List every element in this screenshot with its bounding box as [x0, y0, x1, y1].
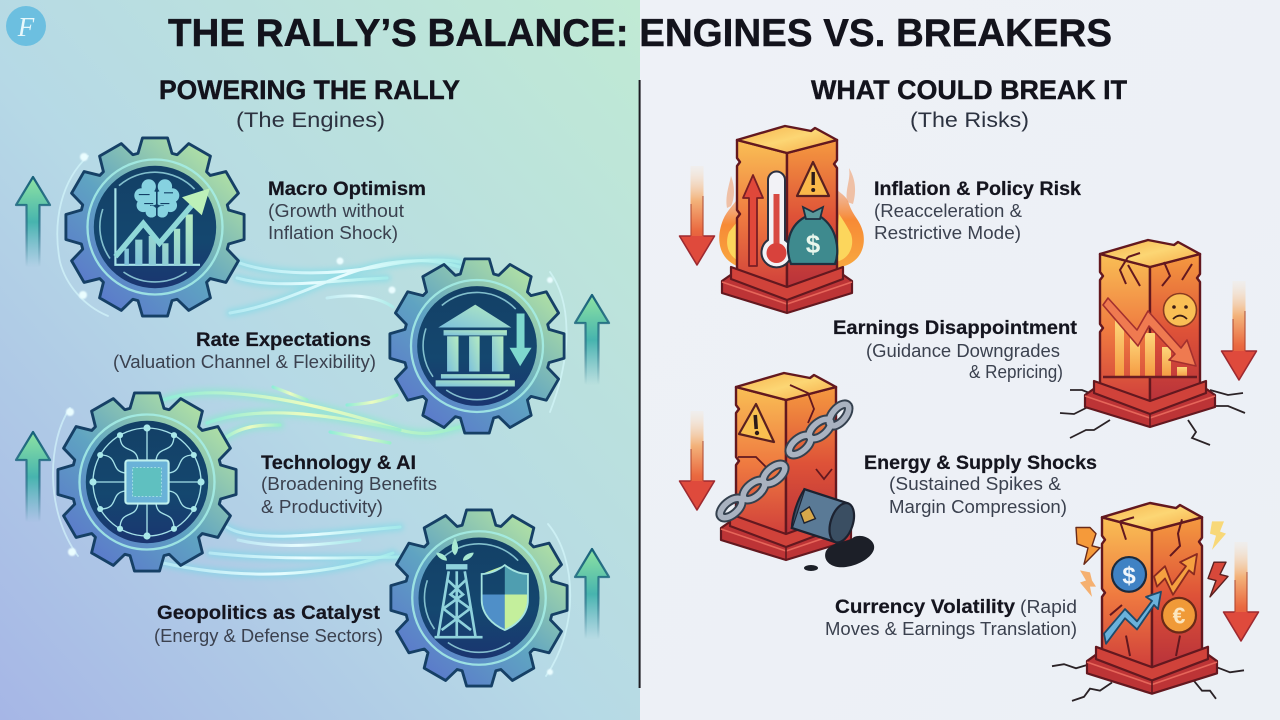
icon: sad face	[1164, 294, 1196, 326]
text: technology and AI: Technology & AI	[261, 452, 416, 474]
icon: money bag	[788, 207, 837, 264]
arrow: down 4	[1224, 542, 1258, 641]
title: THE RALLY’S BALANCE: ENGINES VS. BREAKERS	[168, 12, 1112, 55]
text: inflation and policy risk: (Reacceleration &	[874, 201, 1022, 221]
pillar: currency volatility	[1052, 503, 1244, 701]
ground cracks	[1060, 390, 1245, 445]
text: energy and supply shocks: Margin Compression)	[889, 497, 1067, 517]
text: macro optimism	[268, 178, 426, 243]
logo badge	[6, 6, 46, 46]
cracks	[1120, 253, 1192, 286]
text: technology and AI: & Productivity)	[261, 497, 383, 517]
icon: thermometer	[762, 172, 792, 267]
icon: euro coin: €	[1173, 602, 1185, 628]
icon: euro coin	[1162, 598, 1196, 633]
icon: orange zigzag arrow	[1154, 554, 1197, 595]
pillar: energy and supply shocks	[717, 373, 874, 571]
cracks	[1110, 517, 1182, 656]
icon: declining bars	[1103, 320, 1197, 377]
icon: lightning bolts	[1076, 521, 1228, 597]
icon: growth chart	[115, 188, 210, 265]
arrow: up 1	[16, 177, 50, 267]
arrow: up 3	[16, 432, 50, 522]
icon: brain	[134, 178, 179, 218]
panel: right background	[640, 0, 1280, 720]
text: macro optimism: Macro Optimism	[268, 178, 426, 200]
icon: dollar coin	[1112, 557, 1146, 592]
logo badge: F	[17, 12, 35, 42]
text: geopolitics: Geopolitics as Catalyst	[157, 602, 381, 624]
gear: macro optimism	[66, 138, 244, 316]
icon: falling zigzag arrow	[1103, 298, 1196, 366]
text: technology and AI: (Broadening Benefits	[261, 474, 437, 494]
heading: what could break it	[811, 75, 1127, 132]
text: currency volatility: Moves & Earnings Translation)	[825, 619, 1077, 639]
cracks	[738, 385, 832, 479]
icon: circuit network	[89, 424, 205, 540]
text: macro optimism: Inflation Shock)	[268, 223, 398, 243]
text: rate expectations: Rate Expectations	[196, 329, 371, 351]
text: energy and supply shocks: Energy & Supply Shocks	[864, 452, 1097, 474]
text: earnings disappointment: & Repricing)	[969, 362, 1063, 382]
text: inflation and policy risk: Inflation & Policy Risk	[874, 178, 1081, 200]
text: energy and supply shocks	[864, 452, 1097, 517]
icon: bank building	[436, 305, 515, 386]
divider line	[639, 80, 641, 688]
text: technology and AI	[261, 452, 437, 517]
icon: oil derrick	[434, 537, 483, 637]
panel: left background	[0, 0, 640, 720]
icon: oil barrel	[789, 488, 859, 546]
icon: blue zigzag arrow	[1104, 592, 1161, 644]
arrow: up 4	[575, 549, 609, 639]
heading: powering the rally	[159, 75, 460, 132]
text: earnings disappointment: (Guidance Downgrades	[866, 341, 1060, 361]
icon: money bag: $	[806, 229, 821, 259]
heading: powering the rally: (The Engines)	[236, 108, 385, 132]
icon: dollar coin: $	[1122, 562, 1136, 590]
text: energy and supply shocks: (Sustained Spikes &	[889, 474, 1061, 494]
icon: chip	[125, 460, 169, 504]
gear: rate expectations	[390, 259, 564, 433]
pillar: earnings disappointment	[1060, 240, 1245, 445]
text: currency volatility	[825, 596, 1077, 639]
icon: warning triangle	[797, 162, 829, 196]
energy flows between gears	[53, 153, 570, 676]
text: geopolitics	[154, 602, 383, 646]
arrow: down 1	[680, 166, 714, 265]
text: rate expectations	[113, 329, 376, 372]
heading: what could break it: (The Risks)	[910, 108, 1029, 132]
heading: what could break it: WHAT COULD BREAK IT	[811, 75, 1127, 105]
icon: broken chain	[717, 401, 852, 521]
icon: oil spill	[804, 536, 874, 571]
heading: powering the rally: POWERING THE RALLY	[159, 75, 460, 105]
icon: warning triangle	[739, 404, 774, 442]
arrow: up 2	[575, 295, 609, 385]
gear: technology and AI	[58, 393, 236, 571]
icon: flames	[719, 168, 864, 268]
arrow: down 3	[680, 411, 714, 510]
text: macro optimism: (Growth without	[268, 201, 404, 221]
icon: shield	[482, 565, 528, 630]
text: earnings disappointment	[833, 317, 1078, 382]
arrow: down 2	[1222, 281, 1256, 380]
pillar: inflation and policy risk	[719, 126, 864, 313]
text: geopolitics: (Energy & Defense Sectors)	[154, 626, 383, 646]
text: inflation and policy risk: Restrictive Mode)	[874, 223, 1021, 243]
text: earnings disappointment: Earnings Disappointment	[833, 317, 1078, 339]
gear: geopolitics	[391, 510, 567, 686]
text: inflation and policy risk	[874, 178, 1081, 243]
ground cracks	[1052, 664, 1244, 701]
icon: falling rate arrow	[510, 313, 532, 366]
icon: rising arrow	[743, 175, 763, 266]
text: rate expectations: (Valuation Channel & Flexibility)	[113, 352, 376, 372]
text: currency volatility: (Rapid	[1020, 597, 1077, 617]
text: currency volatility: Currency Volatility	[835, 596, 1015, 618]
